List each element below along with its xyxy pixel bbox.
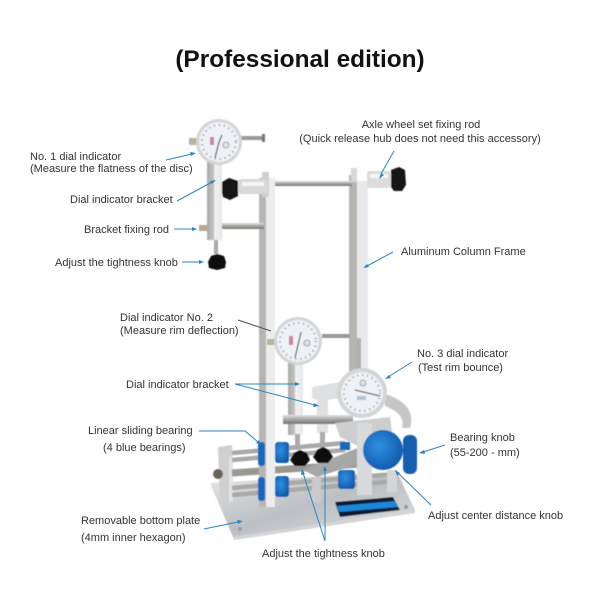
dial indicator 3 bbox=[337, 338, 387, 418]
label: no. 3 dial indicator: (Test rim bounce) bbox=[418, 362, 503, 374]
carriage rod bbox=[283, 415, 353, 424]
label: bracket fixing rod: Bracket fixing rod bbox=[84, 224, 169, 236]
end block of slide rails bbox=[213, 445, 233, 505]
label: no. 3 dial indicator: No. 3 dial indicator bbox=[417, 348, 508, 360]
title: (Professional edition) bbox=[175, 46, 425, 73]
label: adjust the tightness knob left: Adjust the tightness knob bbox=[55, 257, 178, 269]
bracket 3 bbox=[312, 382, 340, 433]
label: dial indicator no. 2 bbox=[120, 312, 271, 337]
tightness knobs 2 and 3 bbox=[290, 432, 333, 466]
label: no. 1 dial indicator: (Measure the flatness of the disc) bbox=[30, 163, 193, 175]
column foot bbox=[259, 440, 275, 507]
label: bearing knob: Bearing knob bbox=[450, 432, 515, 444]
bracket fixing rod bbox=[199, 223, 264, 231]
adjust center distance knob bbox=[363, 430, 417, 474]
label: linear sliding bearing bbox=[88, 425, 261, 454]
label: dial indicator bracket top: Dial indicator bracket bbox=[70, 194, 173, 206]
label: dial indicator no. 2: (Measure rim deflection) bbox=[120, 325, 239, 337]
dial indicator 1 bbox=[189, 119, 265, 165]
label: aluminum column frame bbox=[363, 246, 526, 268]
label: linear sliding bearing: Linear sliding bearing bbox=[88, 425, 193, 437]
label: no. 1 dial indicator: No. 1 dial indicator bbox=[30, 151, 121, 163]
label: axle wheel set fixing rod bbox=[299, 119, 541, 179]
left axle holder and knob bbox=[221, 178, 268, 200]
blue label on plate bbox=[335, 497, 400, 517]
bottom plate bbox=[210, 472, 415, 540]
label: dial indicator bracket lower: Dial indicator bracket bbox=[126, 379, 229, 391]
dial indicator 2 bbox=[267, 317, 350, 365]
label: dial indicator no. 2: Dial indicator No. 2 bbox=[120, 312, 213, 324]
label: linear sliding bearing: (4 blue bearings) bbox=[103, 442, 186, 454]
label: adjust center distance knob bbox=[395, 470, 563, 522]
label: removable bottom plate: (4mm inner hexagon) bbox=[81, 532, 186, 544]
label: adjust the tightness knob bottom: Adjust the tightness knob bbox=[262, 548, 385, 560]
bracket 1 bbox=[207, 160, 222, 240]
carriage plate bbox=[303, 417, 397, 503]
label: axle wheel set fixing rod: (Quick release hub does not need this accessory) bbox=[299, 133, 541, 145]
label: dial indicator bracket top bbox=[70, 180, 216, 206]
label: removable bottom plate: Removable bottom plate bbox=[81, 515, 200, 527]
label: adjust the tightness knob bottom bbox=[262, 466, 385, 560]
label: axle wheel set fixing rod: Axle wheel set fixing rod bbox=[362, 119, 480, 131]
label: no. 1 dial indicator bbox=[30, 151, 196, 175]
aluminum column right bbox=[349, 168, 368, 375]
aluminum column left bbox=[259, 172, 275, 507]
blue bearings bbox=[258, 442, 355, 501]
axle rod bbox=[275, 181, 352, 186]
label: removable bottom plate bbox=[81, 515, 243, 544]
label: no. 3 dial indicator bbox=[385, 348, 508, 379]
bracket 2 bbox=[288, 362, 303, 435]
product illustration: wheel truing stand bbox=[189, 119, 417, 540]
label: bearing knob: (55-200 - mm) bbox=[450, 447, 520, 459]
curved arm bbox=[385, 394, 411, 428]
label: aluminum column frame: Aluminum Column Frame bbox=[401, 246, 526, 258]
label: dial indicator bracket lower bbox=[126, 379, 319, 407]
slide rails bbox=[232, 443, 395, 495]
right axle holder and knob bbox=[367, 167, 406, 191]
tightness knob 1 bbox=[208, 240, 226, 270]
label: adjust center distance knob: Adjust center distance knob bbox=[428, 510, 563, 522]
label: bearing knob bbox=[419, 432, 520, 459]
